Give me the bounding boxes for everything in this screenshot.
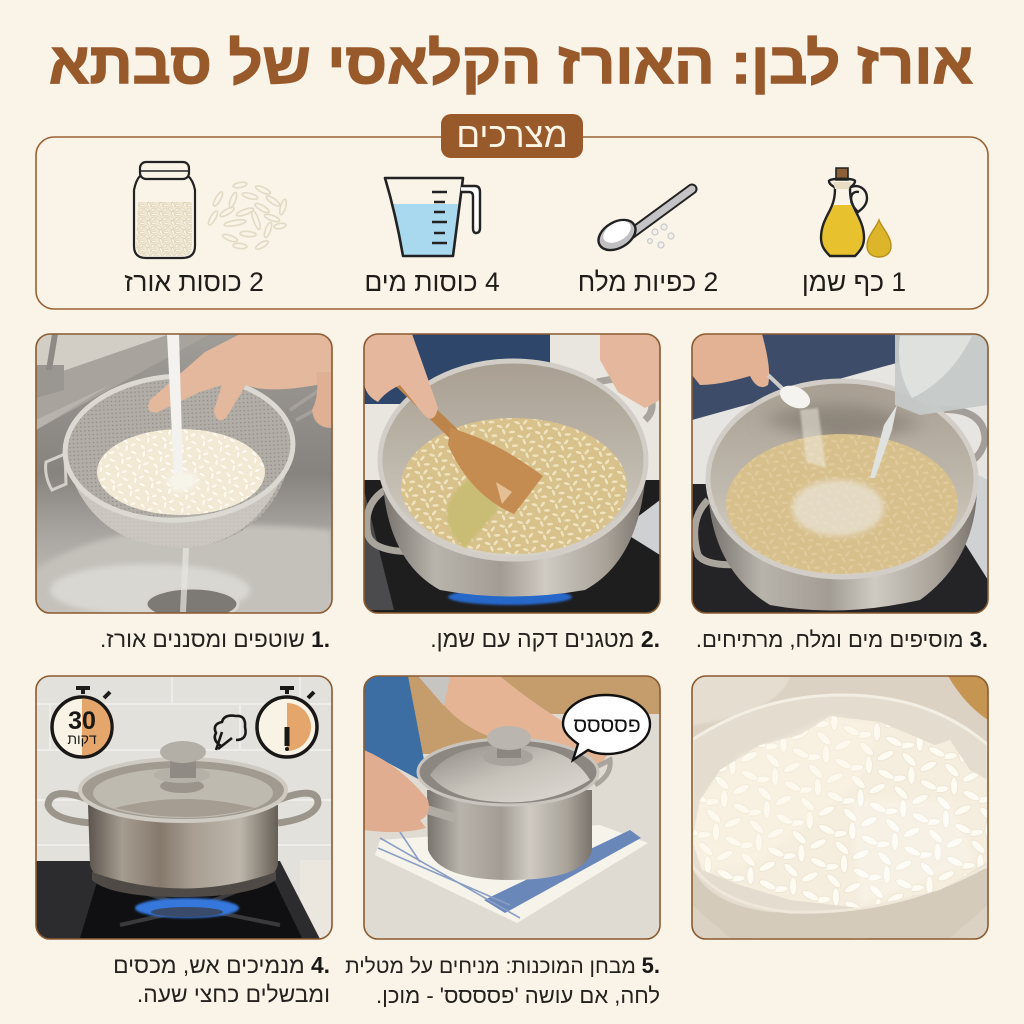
- timer: 30 minutes: [52, 688, 112, 757]
- strainer: [46, 370, 324, 548]
- handles: [597, 379, 652, 420]
- hand: [148, 334, 332, 428]
- hands: [364, 334, 660, 419]
- icon: rice grains: [207, 181, 288, 251]
- panel: step 2 frying rice in oil: [364, 334, 660, 613]
- boiling water with rice: [726, 434, 958, 574]
- stove: [36, 861, 320, 939]
- towel: [375, 825, 648, 923]
- panel: step 4 simmering covered pot: [36, 676, 332, 939]
- timer: 30 minutes: דקות: [67, 731, 97, 747]
- icon: oil bottle: [821, 168, 891, 257]
- panel border: [36, 676, 332, 939]
- panel: finished bowl of rice: [692, 676, 988, 940]
- fried rice: [401, 418, 627, 554]
- caption: step 4: [113, 952, 330, 1007]
- panel: step 3 adding water and salt: [692, 334, 988, 613]
- handles: [590, 760, 610, 785]
- water stream: [167, 334, 183, 475]
- apron: [364, 676, 424, 780]
- ingredient label: rice: 2 כוסות אורז: [124, 267, 264, 297]
- panel border: [36, 334, 332, 613]
- panel: step 1 rinsing rice in strainer: [36, 334, 332, 620]
- glass lid: [80, 741, 286, 821]
- wooden spoon in background: [948, 676, 988, 720]
- speech bubble: [563, 695, 650, 760]
- foam: [792, 480, 884, 536]
- faucet: [36, 365, 64, 398]
- speech bubble: פסססס: [573, 714, 641, 737]
- icon: measuring cup: [385, 178, 480, 256]
- pot: [427, 790, 592, 880]
- caption: step 4: ומבשלים כחצי שעה.: [137, 981, 330, 1007]
- timer: half elapsed: [257, 688, 317, 757]
- ingredient label: salt: 2 כפיות מלח: [578, 267, 718, 297]
- flame: [448, 589, 572, 605]
- panel: step 5 doneness test on towel: [364, 676, 660, 939]
- caption: step 5: 5. מבחן המוכנות: מניחים על מטלית: [345, 953, 660, 978]
- caption: step 4: 4. מנמיכים אש, מכסים: [113, 952, 330, 978]
- hand and spoon: [692, 334, 814, 413]
- pot: [383, 483, 645, 596]
- caption: step 5: לחה, אם עושה 'פסססס' - מוכן.: [376, 983, 660, 1008]
- water swirl and drain: [50, 548, 250, 620]
- bowl: [692, 695, 988, 940]
- panel border: [364, 676, 660, 939]
- icon: steam cloud: [215, 716, 246, 750]
- caption: step 2: 2. מטגנים דקה עם שמן.: [430, 626, 660, 652]
- panel border: [692, 676, 988, 939]
- title: אורז לבן: האורז הקלאסי של סבתא: [49, 31, 973, 96]
- flame: [135, 898, 239, 918]
- icon: oil drop: [867, 220, 891, 257]
- icon: rice jar: [134, 162, 195, 258]
- pot: [708, 490, 977, 610]
- ingredient label: oil: 1 כף שמן: [802, 267, 906, 297]
- panel: ingredients: [36, 114, 988, 309]
- panel border: [364, 334, 660, 613]
- wooden spoon: [396, 378, 543, 514]
- badge: ingredients heading background: [441, 114, 583, 158]
- caption: step 1: 1. שוטפים ומסננים אורז.: [100, 627, 330, 652]
- rice in strainer: [97, 429, 265, 515]
- cooked rice: [692, 716, 988, 908]
- panel border: [692, 334, 988, 613]
- blurred background bowl: [692, 676, 790, 725]
- pitcher and pour: [870, 334, 988, 478]
- caption: step 3: 3. מוסיפים מים ומלח, מרתיחים.: [696, 627, 988, 652]
- ingredient label: water: 4 כוסות מים: [364, 267, 500, 297]
- handles: [48, 793, 318, 823]
- oil pool: [447, 478, 498, 548]
- pot: [88, 805, 278, 895]
- timer: 30 minutes: 30: [68, 707, 96, 735]
- handles: [944, 408, 988, 462]
- salt falling: [800, 408, 826, 468]
- icon: spoon with salt: [593, 189, 692, 256]
- steel lid: [418, 726, 598, 805]
- heading: ingredients: מצרכים: [456, 116, 568, 155]
- hand on handle: [364, 750, 429, 832]
- arm: [444, 676, 607, 764]
- caption: step 5: [345, 953, 660, 1008]
